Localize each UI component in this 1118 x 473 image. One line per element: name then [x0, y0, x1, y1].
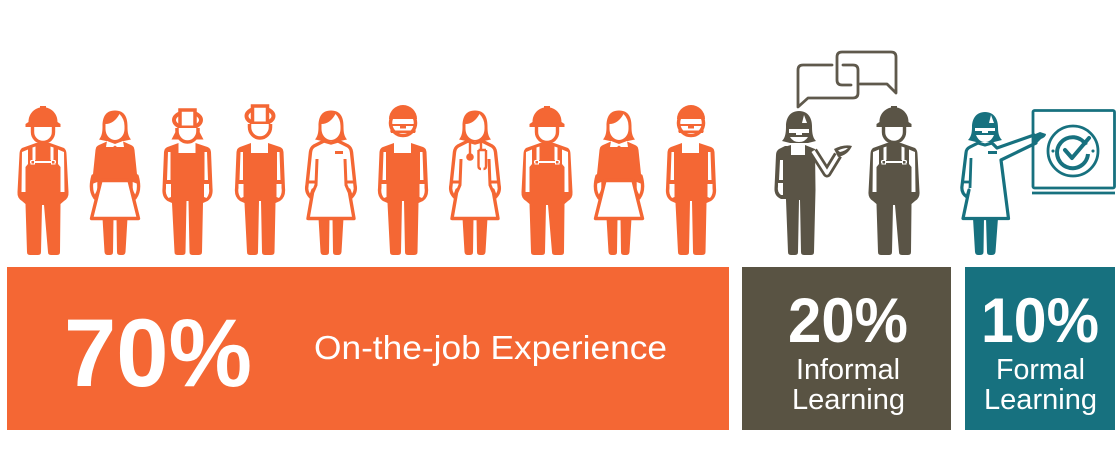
panel: 20% informal learning	[742, 267, 951, 430]
figure: worker with hard hat listening	[868, 106, 920, 255]
stat: 20%: 20%	[788, 286, 908, 356]
worker with visor 1	[378, 105, 428, 255]
worker with hard hat 2	[521, 106, 573, 255]
woman in dress with badge	[307, 110, 355, 255]
figure: woman presenting at board	[962, 112, 1046, 255]
doctor with stethoscope	[451, 110, 499, 255]
label: informal learning: Learning	[792, 384, 905, 416]
worker with helmet and long hair	[162, 110, 213, 255]
label: on-the-job experience: On-the-job Experience	[314, 330, 667, 367]
panel: 10% formal learning	[965, 267, 1115, 430]
icon: interlocking speech bubbles	[798, 52, 896, 107]
worker with helmet	[235, 106, 285, 255]
woman in blouse and skirt 1	[91, 110, 139, 255]
label: formal learning: Formal	[996, 354, 1085, 386]
worker with hard hat 1	[17, 106, 69, 255]
figure: woman gesturing while talking	[774, 111, 852, 255]
worker with visor 2	[666, 105, 716, 255]
woman in blouse and skirt 2	[595, 110, 643, 255]
panel: 70% on-the-job experience	[7, 267, 729, 430]
people row: on-the-job experience	[17, 105, 716, 255]
icon: board with check badge	[1032, 110, 1115, 193]
label: formal learning: Learning	[984, 384, 1097, 416]
stat: 10%: 10%	[981, 286, 1099, 356]
label: informal learning: Informal	[796, 354, 900, 386]
stat: 70%: 70%	[64, 299, 252, 406]
